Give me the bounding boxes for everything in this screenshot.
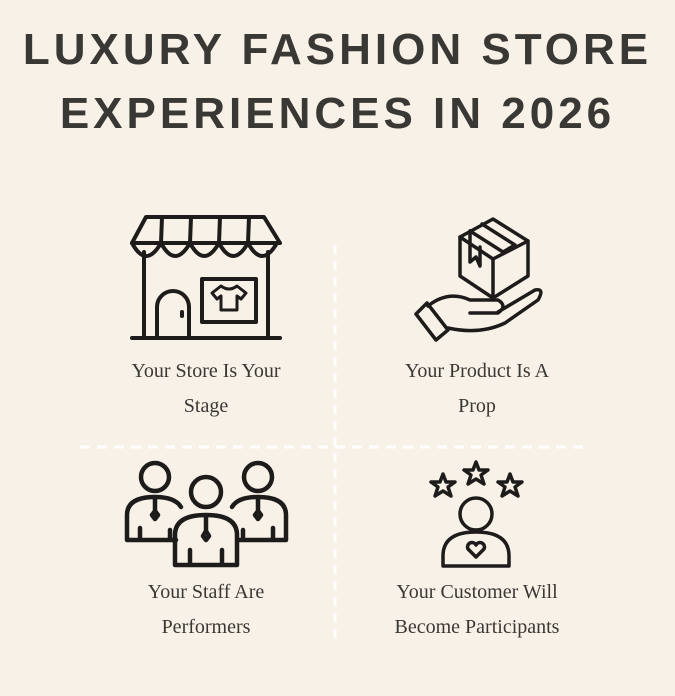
label: customer — [395, 581, 559, 638]
label: product: Your Product Is A — [405, 360, 549, 382]
icon: customer with stars — [431, 462, 522, 566]
title: LUXURY FASHION STORE — [23, 25, 652, 74]
title: EXPERIENCES IN 2026 — [60, 89, 615, 138]
label: store — [131, 360, 281, 417]
label: staff — [148, 581, 264, 638]
label: customer: Your Customer Will — [396, 581, 558, 603]
label: staff: Performers — [162, 616, 250, 638]
label: product — [405, 360, 549, 417]
label: product: Prop — [458, 395, 496, 417]
label: store: Stage — [184, 395, 228, 417]
icon: staff — [127, 463, 286, 565]
icon: hand with box — [416, 219, 541, 340]
label: store: Your Store Is Your — [131, 360, 281, 382]
label: customer: Become Participants — [395, 616, 559, 638]
label: staff: Your Staff Are — [148, 581, 264, 603]
title — [23, 25, 652, 138]
